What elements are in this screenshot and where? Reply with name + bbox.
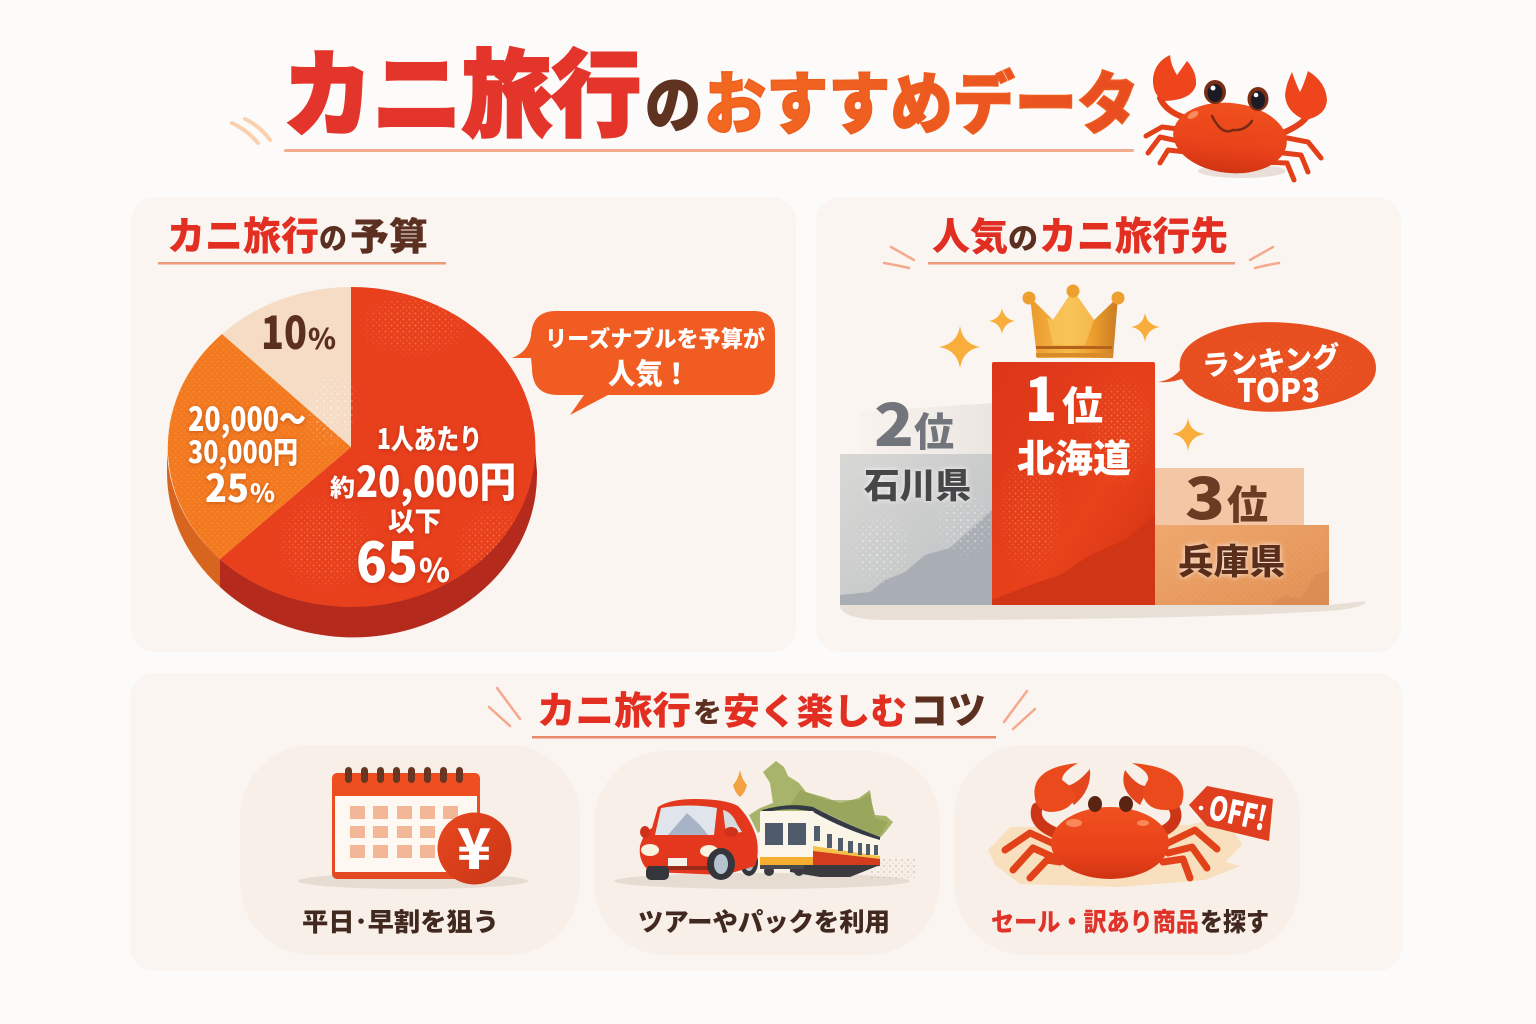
title accent strokes: [232, 119, 270, 143]
panel: popular destinations: [816, 197, 1401, 652]
panel: saving tips: [130, 673, 1402, 971]
callout: reasonable budget: [512, 311, 775, 415]
icon: calendar and yen coin: ¥: [457, 805, 491, 886]
callout: ranking top 3: ランキング: [1201, 335, 1341, 385]
podium: 3rd place: 位: [1227, 473, 1268, 531]
title: [232, 20, 1139, 156]
heading: popular destinations: [884, 206, 1279, 268]
icon: car, train and map: [614, 761, 915, 889]
heading: budget: [158, 206, 446, 264]
heading: popular destinations: の: [1008, 214, 1038, 258]
podium: 2nd place: 石川県: [864, 458, 971, 509]
panel: budget: [131, 197, 796, 652]
label: 65%: 65: [356, 518, 418, 598]
label: 65%: 以下: [388, 500, 441, 539]
heading: popular destinations: カニ旅行先: [1039, 206, 1228, 262]
car: [640, 799, 758, 880]
title text: カニ旅行: [283, 20, 641, 156]
slice: 10%: [222, 287, 351, 447]
label: sale items: を探す: [1200, 902, 1269, 939]
right claw: [1285, 71, 1327, 120]
podium shadow: [840, 601, 1365, 620]
pie side: [167, 447, 537, 637]
title text: の: [645, 55, 701, 145]
podium: 2nd place: 2: [874, 379, 914, 463]
heading: budget: 予算: [350, 206, 428, 261]
label: tours and packages: ツアーやパックを利用: [638, 902, 890, 939]
infographic canvas: [130, 46, 1402, 971]
callout: reasonable budget: リーズナブルを予算が: [545, 322, 765, 354]
heading: budget: の: [319, 214, 347, 258]
heading: popular destinations: 人気: [932, 206, 1008, 261]
heading: saving tips: コツ: [910, 680, 986, 735]
title text: おすすめデータ: [704, 49, 1139, 148]
heading: saving tips: カニ旅行: [537, 680, 691, 735]
title underline: [284, 149, 1134, 152]
callout: reasonable budget: 人気！: [608, 351, 690, 393]
heading: saving tips: 安く楽しむ: [723, 683, 907, 735]
slice: 25%: [168, 334, 351, 559]
podium: 3rd place: 3: [1185, 454, 1225, 536]
label: 25%: [188, 393, 306, 513]
podium: 3rd place: 兵庫県: [1178, 534, 1285, 585]
card: sale items: [954, 745, 1300, 955]
right claw: [1123, 763, 1183, 810]
icon: calendar and yen coin: [298, 767, 528, 889]
heading: saving tips: を: [693, 691, 722, 731]
icon: sparkles: [939, 308, 1205, 451]
podium: 2nd place: [840, 402, 992, 605]
label: 25%: %: [250, 474, 275, 510]
icon: title crab mascot: [1146, 55, 1327, 180]
icon: crown: [1022, 284, 1124, 358]
left claw: [1034, 763, 1090, 812]
podium: 1st place: 北海道: [1017, 428, 1131, 483]
callout: ranking top 3: TOP3: [1237, 366, 1320, 412]
pie chart: [167, 287, 540, 637]
heading: saving tips: [489, 680, 1035, 738]
label: 65%: %: [419, 546, 450, 592]
label: 25%: 20,000～: [188, 393, 306, 441]
label: 10%: %: [308, 318, 336, 358]
label: weekday early discount: 平日･早割を狙う: [302, 902, 499, 939]
label: 10%: 10: [261, 297, 307, 362]
label: 25%: 25: [205, 458, 249, 513]
train: [760, 805, 880, 877]
icon: crab with off tag: [988, 763, 1273, 887]
podium: 2nd place: 位: [914, 400, 954, 458]
label: sale items: セール・訳あり商品: [991, 902, 1199, 939]
title text: [283, 20, 1139, 156]
off tag: OFF!: [1205, 782, 1272, 841]
slice: 65%: [220, 287, 535, 607]
label: 65%: [330, 418, 516, 598]
label: 65%: 1人あたり: [377, 418, 482, 458]
podium: 1st place: [992, 352, 1155, 605]
callout: ranking top 3: [1158, 322, 1376, 412]
podium: 1st place: 位: [1062, 374, 1103, 432]
label: 65%: 20,000円: [356, 449, 516, 510]
left claw: [1153, 55, 1196, 101]
podium: 1st place: 1: [1025, 352, 1057, 439]
card: tours and packages: [594, 751, 940, 955]
label: 65%: 約: [330, 468, 355, 503]
heading: budget: カニ旅行: [167, 206, 319, 262]
label: 25%: 30,000円: [188, 428, 298, 472]
card: weekday early discount: [240, 745, 580, 955]
off tag: [1189, 782, 1273, 841]
podium: 3rd place: [1155, 454, 1329, 605]
